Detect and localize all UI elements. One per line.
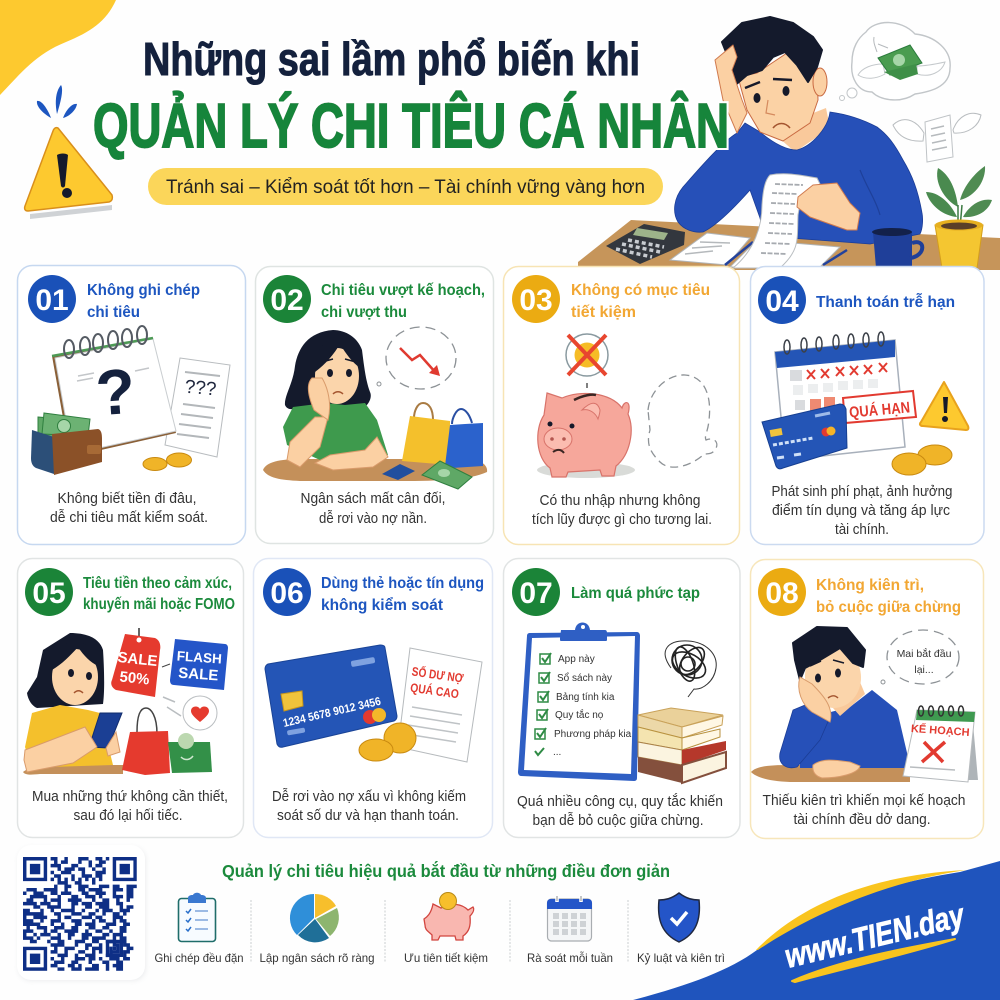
website banner xyxy=(633,861,1000,1000)
yellow underline xyxy=(792,939,955,982)
badge 05: 05 xyxy=(32,577,66,610)
heading 06: không kiểm soát xyxy=(321,596,444,614)
footer tip: piggy bank: Ưu tiên tiết kiệm xyxy=(404,951,488,965)
footer tip: piggy bank xyxy=(404,892,488,965)
footer tip: clipboard: Ghi chép đều đặn xyxy=(154,951,244,965)
heading 02: Chi tiêu vượt kế hoạch, xyxy=(321,282,485,299)
badge 01 xyxy=(28,275,76,323)
panel: 06 xyxy=(254,558,492,838)
illustration: credit card, debt receipt, coins: SỐ DƯ NỢ xyxy=(411,663,465,686)
footer tip: clipboard xyxy=(154,893,244,965)
description 04: tài chính. xyxy=(835,522,889,538)
description 07: bạn dễ bỏ cuộc giữa chừng. xyxy=(532,812,704,829)
badge 04: 04 xyxy=(765,285,799,318)
panel: 04 xyxy=(750,266,984,544)
sweater xyxy=(675,112,923,244)
illustration: clipboard checklist, scribble, books: Bảng tính kia xyxy=(556,692,615,703)
illustration: credit card, debt receipt, coins: 1234 5678 9012 3456 xyxy=(282,696,382,730)
description 01: dễ chi tiêu mất kiểm soát. xyxy=(50,509,208,526)
panel: 01 xyxy=(18,266,246,544)
badge 02: 02 xyxy=(270,284,304,317)
illustration: credit card, debt receipt, coins xyxy=(265,645,482,762)
eyes and brows xyxy=(745,79,792,128)
description 08: Thiếu kiên trì khiến mọi kế hoạch xyxy=(762,793,966,809)
description 04 xyxy=(772,484,952,538)
illustration: clipboard checklist, scribble, books xyxy=(518,622,726,783)
heading 01 xyxy=(87,282,200,321)
illustration: clipboard checklist, scribble, books: ... xyxy=(553,747,561,758)
description 03 xyxy=(532,493,712,528)
heading 03: tiết kiệm xyxy=(571,304,636,321)
header illustration: worried man at desk xyxy=(578,17,1000,270)
footer heading: Quản lý chi tiêu hiệu quả bắt đầu từ những điều đơn giản xyxy=(222,860,670,881)
yellow swoosh xyxy=(756,870,966,950)
description 06: Dễ rơi vào nợ xấu vì không kiếm xyxy=(272,788,466,805)
badge 08: 08 xyxy=(765,577,799,610)
illustration: tired man, speech bubble, plan calendar: Mai bắt đầu xyxy=(897,647,952,660)
illustration: clipboard checklist, scribble, books: Sổ sách này xyxy=(557,672,612,684)
heading 02: chi vượt thu xyxy=(321,304,407,321)
potted plant xyxy=(926,166,992,268)
title xyxy=(93,33,729,161)
panel: 05 xyxy=(18,558,244,838)
description 01 xyxy=(50,491,208,526)
footer tip: shield xyxy=(637,893,725,965)
mug xyxy=(872,228,922,268)
yellow corner shape xyxy=(0,0,116,95)
footer tip: calendar: Rà soát mỗi tuần xyxy=(527,950,613,965)
heading 03 xyxy=(571,282,710,321)
illustration: clipboard checklist, scribble, books: Phương pháp kia xyxy=(554,729,632,740)
heading 03: Không có mục tiêu xyxy=(571,282,710,299)
description 06 xyxy=(272,788,466,824)
footer tip: pie chart xyxy=(260,894,374,965)
description 07 xyxy=(517,793,723,829)
footer tip: calendar xyxy=(527,895,613,965)
description 08: tài chính đều dở dang. xyxy=(794,812,930,828)
badge 04 xyxy=(758,276,806,324)
hand on head xyxy=(715,45,747,133)
heading 01: Không ghi chép xyxy=(87,282,200,299)
long receipt xyxy=(733,174,820,268)
description 02 xyxy=(300,491,446,527)
illustration: overdue calendar, credit card, warning, coins: QUÁ HẠN xyxy=(848,399,911,422)
heading 02 xyxy=(321,282,485,321)
description 07: Quá nhiều công cụ, quy tắc khiến xyxy=(517,793,723,810)
badge 03 xyxy=(512,275,560,323)
right hand xyxy=(797,183,860,230)
badge 08 xyxy=(758,568,806,616)
heading 01: chi tiêu xyxy=(87,304,140,321)
heading 05: khuyến mãi hoặc FOMO xyxy=(83,596,235,613)
neck xyxy=(770,108,830,152)
badge 07 xyxy=(512,568,560,616)
illustration: clipboard checklist, scribble, books: App này xyxy=(558,654,595,665)
face xyxy=(738,53,818,141)
description 05 xyxy=(32,789,228,824)
heading 06: Dùng thẻ hoặc tín dụng xyxy=(321,575,484,592)
illustration: woman with phone, sale tags, bags: FLASH xyxy=(176,648,222,667)
hair xyxy=(722,17,822,87)
QR code card xyxy=(17,845,145,980)
description 05: Mua những thứ không cần thiết, xyxy=(32,789,228,805)
calculator xyxy=(606,224,685,264)
subtitle pill: Tránh sai – Kiểm soát tốt hơn – Tài chính vững vàng hơn xyxy=(166,177,645,198)
heading 05: Tiêu tiền theo cảm xúc, xyxy=(83,575,232,592)
badge 07: 07 xyxy=(519,577,553,610)
description 06: soát số dư và hạn thanh toán. xyxy=(277,808,459,824)
heading 08: bỏ cuộc giữa chừng xyxy=(816,599,961,616)
illustration: notebook, wallet, receipt and coins: ??? xyxy=(184,377,217,400)
title: Những sai lầm phổ biến khi xyxy=(143,33,640,85)
badge 02 xyxy=(263,275,311,323)
thought bubble with flying money xyxy=(840,22,950,100)
heading 08: Không kiên trì, xyxy=(816,577,924,594)
description 04: Phát sinh phí phạt, ảnh hưởng xyxy=(772,484,952,500)
illustration: worried woman, chart bubble, bags xyxy=(263,327,487,489)
description 05: sau đó lại hối tiếc. xyxy=(74,808,182,824)
footer tip: pie chart: Lập ngân sách rõ ràng xyxy=(260,951,374,965)
illustration: clipboard checklist, scribble, books: Quy tắc nọ xyxy=(555,708,604,721)
illustration: tired man, speech bubble, plan calendar: lại... xyxy=(914,664,934,676)
heading 05 xyxy=(83,575,235,613)
badge 03: 03 xyxy=(519,284,553,317)
illustration: notebook, wallet, receipt and coins: ? xyxy=(93,355,137,429)
illustration: overdue calendar, credit card, warning, coins xyxy=(762,332,968,475)
description 04: điểm tín dụng và tăng áp lực xyxy=(772,503,950,519)
panel: 02 xyxy=(256,266,494,544)
illustration: woman with phone, sale tags, bags xyxy=(23,628,228,775)
illustration: woman with phone, sale tags, bags: SALE xyxy=(178,665,219,684)
desk xyxy=(578,220,1000,270)
badge 01: 01 xyxy=(35,284,69,317)
heading 07: Làm quá phức tạp xyxy=(571,585,700,602)
illustration: crossed target and piggy bank xyxy=(537,334,717,478)
badge 06 xyxy=(263,568,311,616)
flying receipt with wings xyxy=(893,113,981,162)
badge 06: 06 xyxy=(270,577,304,610)
panel: 07 xyxy=(504,558,740,838)
description 02: dễ rơi vào nợ nần. xyxy=(319,510,427,527)
illustration: notebook, wallet, receipt and coins xyxy=(31,326,230,475)
illustration: woman with phone, sale tags, bags: SALE xyxy=(117,649,158,670)
heading 06 xyxy=(321,575,484,614)
illustration: credit card, debt receipt, coins: QUÁ CAO xyxy=(409,680,460,701)
panel: 03 xyxy=(504,266,740,544)
badge 05 xyxy=(25,568,73,616)
heading 08 xyxy=(816,577,961,616)
description 02: Ngân sách mất cân đối, xyxy=(300,491,446,507)
footer tip: shield: Kỷ luật và kiên trì xyxy=(637,951,725,965)
title: QUẢN LÝ CHI TIÊU CÁ NHÂN xyxy=(93,92,729,161)
illustration: woman with phone, sale tags, bags: 50% xyxy=(119,669,150,689)
alert: yellow warning triangle with blue sparks xyxy=(25,85,112,219)
notebook and pen xyxy=(670,233,847,267)
description 08 xyxy=(762,793,966,828)
description 01: Không biết tiền đi đâu, xyxy=(58,491,196,507)
description 03: tích lũy được gì cho tương lai. xyxy=(532,512,712,528)
illustration: tired man, speech bubble, plan calendar xyxy=(751,627,978,782)
illustration: tired man, speech bubble, plan calendar: KẾ HOẠCH xyxy=(911,722,970,739)
subtitle pill xyxy=(148,168,663,205)
heading 04: Thanh toán trễ hạn xyxy=(816,292,955,311)
panel: 08 xyxy=(750,560,984,838)
description 03: Có thu nhập nhưng không xyxy=(540,493,700,509)
